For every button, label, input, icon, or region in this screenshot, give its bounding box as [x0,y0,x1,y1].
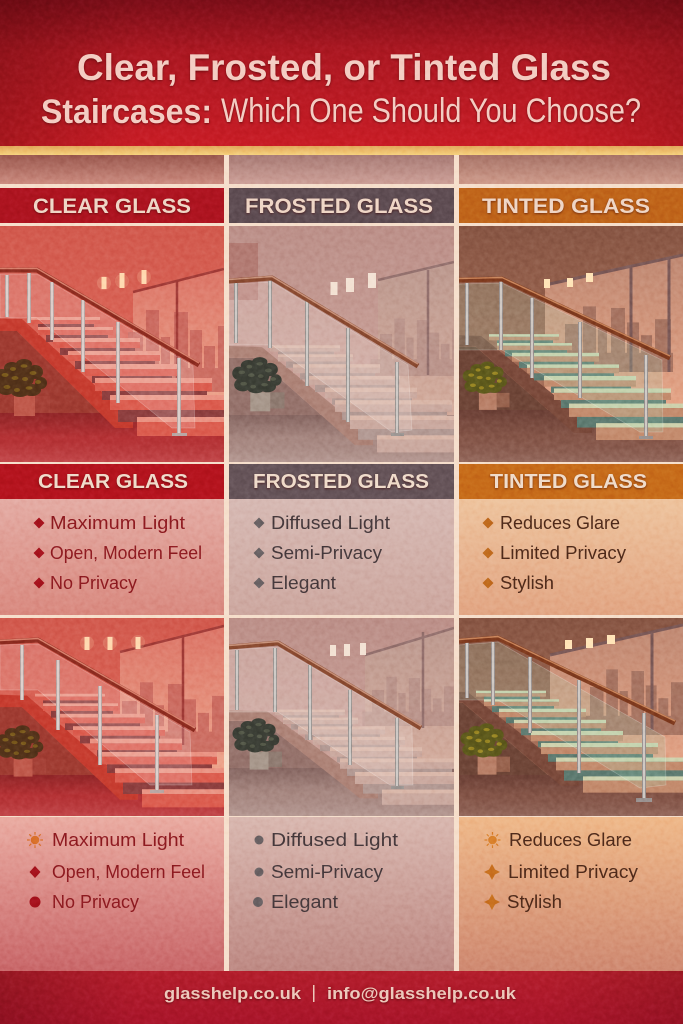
plant [463,361,510,410]
highlight: no privacy: No Privacy [52,892,139,912]
highlight: reduces glare: Reduces Glare [509,830,632,850]
feature: limited privacy: Limited Privacy [500,543,626,563]
stair treads [229,710,454,805]
feature: diffused light: Diffused Light [271,513,390,533]
stair treads [459,334,683,440]
glass balustrade [0,644,192,785]
glass balustrade [459,642,666,788]
illustration: clear glass staircase, second view [0,618,224,816]
title line two [41,92,641,131]
panel: frosted glass features [229,499,454,615]
sub-header: tinted glass: TINTED GLASS [490,471,647,493]
illustration: clear glass staircase [0,226,247,462]
glass balustrade [229,647,413,785]
highlight: semi-privacy: Semi-Privacy [271,862,383,882]
window with skyline [120,624,224,768]
stair treads [229,345,454,452]
pendant lights [97,270,151,290]
window with skyline [128,268,224,395]
pendant lights [544,273,593,288]
handrail [229,642,421,728]
highlight: limited privacy: Limited Privacy [508,862,638,882]
sub-header: frosted glass [229,464,454,499]
title line two: Staircases: [41,93,212,131]
posts [237,648,404,789]
sub-header: clear glass: CLEAR GLASS [38,471,188,493]
stair treads [386,690,683,793]
column header: frosted glass: FROSTED GLASS [245,195,433,218]
highlight: open, modern feel: Open, Modern Feel [52,862,205,882]
posts [236,280,404,436]
posts [467,642,652,802]
highlight: diffused light: Diffused Light [271,830,398,850]
muted band above column headers [0,155,683,184]
footer banner with contact details [0,971,683,1024]
handrail [229,276,418,366]
illustration: frosted glass staircase [229,226,454,462]
highlight: stylish: Stylish [507,892,562,912]
illustration: tinted glass staircase, second view [386,618,683,816]
column header: clear glass [0,188,224,223]
window with skyline [370,260,454,376]
window with skyline [362,626,454,758]
glass balustrade [0,274,195,428]
pendant lights [330,273,376,295]
posts [22,645,164,793]
panel: tinted glass features [459,499,683,615]
posts [467,281,653,439]
highlight: maximum light: Maximum Light [52,830,184,850]
feature: stylish: Stylish [500,573,554,593]
plant [460,723,510,775]
glass balustrade [459,283,663,432]
panel: frosted glass highlights [229,817,454,971]
highlight: stylish [484,892,562,912]
glass balustrade [229,282,412,432]
window with skyline [545,255,683,410]
header banner with title [0,0,683,147]
sub-header: frosted glass: FROSTED GLASS [253,471,429,493]
plant [232,718,282,770]
column header: frosted glass [229,188,454,223]
pendant lights [80,635,145,650]
illustration: tinted glass staircase [459,226,683,462]
sub-header: clear glass [0,464,224,499]
illustration: frosted glass staircase, second view [229,618,454,816]
panel: tinted glass highlights [459,817,683,971]
gold divider strip [0,146,683,155]
panel: clear glass features [0,499,224,615]
feature: open, modern feel: Open, Modern Feel [50,543,202,563]
feature: no privacy: No Privacy [50,573,137,593]
feature: semi-privacy: Semi-Privacy [271,543,382,563]
feature: reduces glare: Reduces Glare [500,513,620,533]
window with skyline [550,625,683,775]
stair treads [0,694,224,808]
column header: clear glass: CLEAR GLASS [33,195,191,218]
column header: tinted glass: TINTED GLASS [482,195,650,218]
feature: elegant: Elegant [271,573,336,593]
highlight: elegant: Elegant [271,892,338,912]
handrail [459,636,675,723]
pendant lights [565,635,615,649]
handrail [0,268,199,365]
sub-header: tinted glass [459,464,683,499]
posts [7,273,187,436]
footer website: glasshelp.co.uk [164,984,302,1003]
footer email: info@glasshelp.co.uk [327,984,517,1003]
feature: maximum light: Maximum Light [50,513,185,533]
title line one: Clear, Frosted, or Tinted Glass [77,47,611,88]
handrail [0,638,195,730]
handrail [459,278,670,358]
stair treads [0,317,224,436]
plant [0,359,50,416]
panel: clear glass highlights [0,817,224,971]
pendant lights [330,643,366,656]
column header: tinted glass [459,188,683,223]
plant [0,725,46,777]
plant [232,357,284,411]
